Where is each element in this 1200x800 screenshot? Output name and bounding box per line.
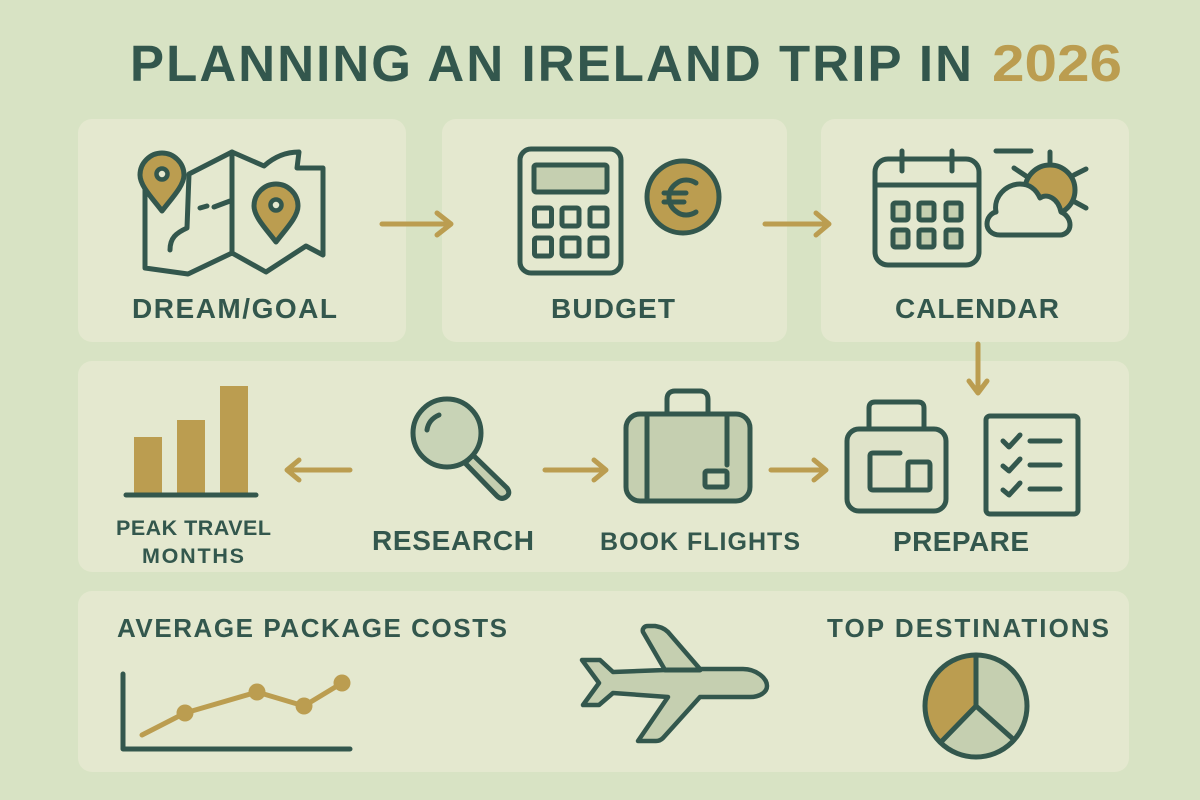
title: 2026 — [992, 35, 1122, 93]
arrow: budget to calendar — [765, 213, 829, 235]
icon: euro coin — [647, 161, 719, 233]
icon: folded map with pins — [140, 152, 323, 274]
label: prepare: PREPARE — [893, 526, 1029, 557]
panel: summary — [78, 591, 1129, 772]
arrow: dream to budget — [382, 213, 451, 235]
heading: average package costs: AVERAGE PACKAGE COSTS — [117, 613, 507, 643]
arrow: calendar to prepare — [969, 344, 987, 393]
icon: travel bag — [847, 402, 946, 511]
panel: dream/goal — [78, 119, 406, 342]
arrow: research to flights — [545, 460, 606, 480]
icon: airplane — [582, 626, 767, 741]
heading: top destinations: TOP DESTINATIONS — [827, 613, 1109, 643]
icon: magnifying glass — [413, 399, 509, 498]
pie chart — [925, 655, 1027, 757]
panel: planning steps — [78, 361, 1129, 572]
label: budget: BUDGET — [551, 293, 675, 324]
icon: calculator — [520, 149, 621, 273]
label: dream/goal: DREAM/GOAL — [132, 293, 337, 324]
label: peak travel months: MONTHS — [142, 544, 244, 568]
label: peak travel months — [116, 516, 271, 568]
line chart — [123, 674, 350, 749]
icon: suitcase — [626, 391, 750, 501]
label: book flights: BOOK FLIGHTS — [600, 528, 800, 556]
label: calendar: CALENDAR — [895, 293, 1059, 324]
panel: calendar — [821, 119, 1129, 342]
icon: bar chart peak travel months — [126, 386, 256, 495]
icon: checklist — [986, 416, 1078, 514]
arrow: research to peak months — [287, 460, 350, 480]
title: PLANNING AN IRELAND TRIP IN — [130, 35, 972, 92]
icon: calendar — [875, 151, 979, 265]
panel: budget — [442, 119, 787, 342]
icon: sun and cloud — [987, 151, 1086, 235]
label: peak travel months: PEAK TRAVEL — [116, 516, 271, 540]
arrow: flights to prepare — [771, 460, 826, 480]
label: research: RESEARCH — [372, 525, 534, 556]
